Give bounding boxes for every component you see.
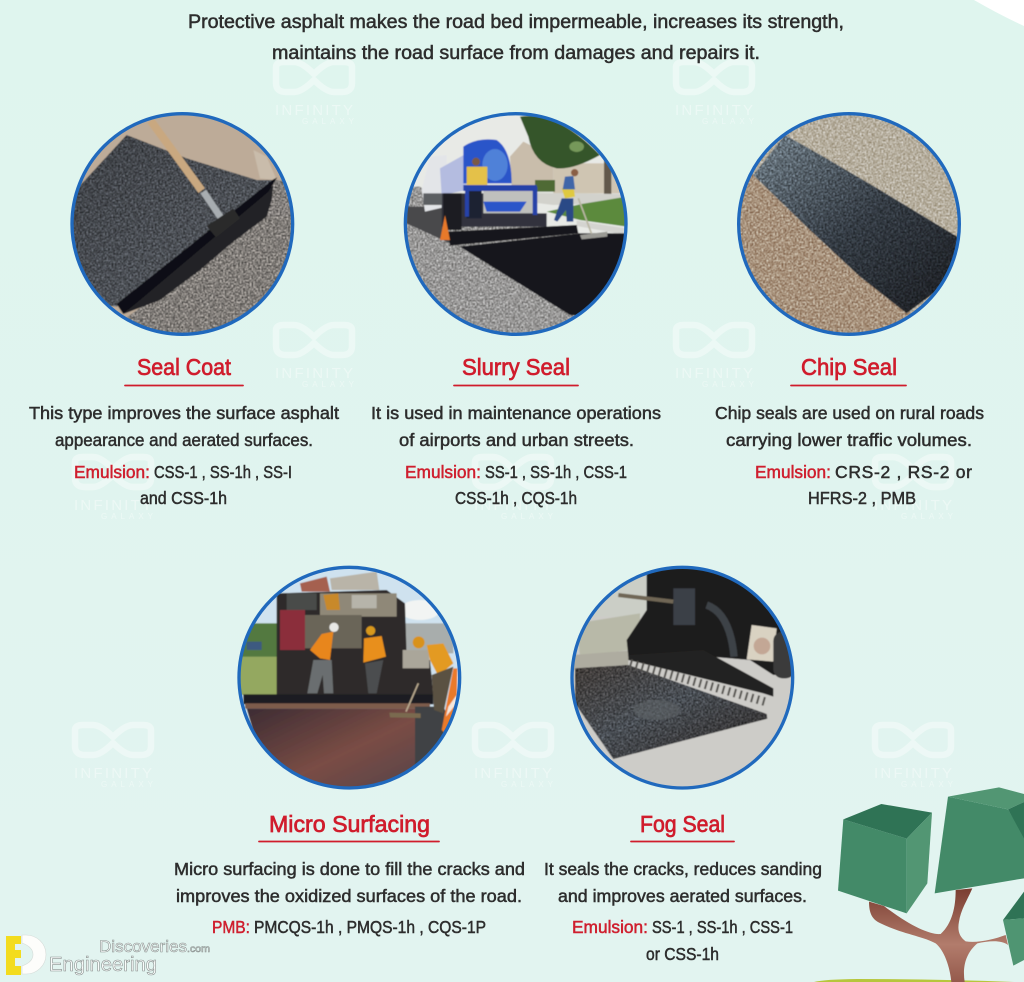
logo wordmark: .com: [187, 944, 210, 955]
photo: micro surfacing crew: [237, 566, 462, 790]
panel: slurry seal text: [371, 354, 661, 508]
description: carrying lower traffic volumes.: [726, 430, 972, 450]
workers: [310, 632, 333, 660]
description: [371, 403, 661, 450]
description: Chip seals are used on rural roads: [715, 403, 984, 423]
photo ring: [572, 567, 793, 788]
description: It is used in maintenance operations: [371, 403, 661, 423]
emulsion grades: Emulsion:: [755, 462, 831, 482]
photo ring: [72, 114, 293, 334]
panel: micro surfacing text: [174, 811, 525, 937]
emulsion grades: [755, 462, 972, 508]
description: Micro surfacing is done to fill the cracks and: [174, 859, 525, 879]
description: It seals the cracks, reduces sanding: [544, 859, 822, 879]
heading: seal coat: Seal Coat: [137, 354, 232, 380]
heading: chip seal: Chip Seal: [801, 354, 897, 380]
photo: chip seal surface: [737, 112, 961, 336]
description: [544, 859, 822, 906]
logo wordmark: [49, 937, 210, 976]
description: of airports and urban streets.: [399, 430, 634, 450]
heading underline: [454, 384, 578, 386]
binder grades: PMB:: [212, 917, 250, 937]
description: appearance and aerated surfaces.: [55, 430, 313, 450]
heading underline: [791, 384, 906, 386]
emulsion grades: [405, 462, 627, 508]
panel: fog seal text: [544, 811, 822, 964]
emulsion grades: HFRS-2 , PMB: [808, 488, 916, 508]
watermarks: [74, 62, 954, 789]
icon: low-poly tree: [814, 787, 1024, 982]
emulsion grades: SS-1 , SS-1h , CSS-1: [652, 917, 793, 937]
description: improves the oxidized surfaces of the road.: [176, 886, 522, 906]
heading: fog seal: Fog Seal: [640, 811, 725, 837]
photo ring: [239, 567, 460, 788]
emulsion grades: Emulsion:: [405, 462, 481, 482]
white corner shape: [974, 0, 1024, 26]
panel: chip seal text: [715, 354, 984, 508]
description: and improves aerated surfaces.: [558, 886, 807, 906]
emulsion grades: CSS-1 , SS-1h , SS-I: [154, 462, 292, 482]
photo: fog seal spray truck: [570, 566, 794, 790]
heading underline: [631, 840, 734, 842]
icon: ED mark: [6, 935, 46, 975]
logo wordmark: Discoveries: [99, 937, 187, 956]
description: [715, 403, 984, 450]
title: [188, 12, 844, 64]
photo ring: [739, 114, 959, 334]
emulsion grades: and CSS-1h: [140, 488, 227, 508]
photo: slurry seal machine: [404, 112, 628, 336]
logo: Engineering Discoveries: [6, 935, 210, 976]
emulsion grades: Emulsion:: [74, 462, 150, 482]
emulsion grades: or CSS-1h: [646, 944, 719, 964]
emulsion grades: SS-1 , SS-1h , CSS-1: [485, 462, 627, 482]
binder grades: PMCQS-1h , PMQS-1h , CQS-1P: [254, 917, 486, 937]
description: [174, 859, 525, 906]
heading underline: [259, 840, 439, 842]
emulsion grades: [74, 462, 292, 508]
logo wordmark: Engineering: [49, 954, 157, 976]
photo: seal coat squeegee: [70, 112, 294, 336]
emulsion grades: Emulsion:: [572, 917, 648, 937]
emulsion grades: [572, 917, 793, 964]
heading: slurry seal: Slurry Seal: [462, 354, 570, 380]
heading underline: [125, 384, 243, 386]
description: This type improves the surface asphalt: [29, 403, 339, 423]
heading: micro surfacing: Micro Surfacing: [269, 811, 430, 837]
photo ring: [405, 114, 626, 334]
description: [29, 403, 339, 450]
title: Protective asphalt makes the road bed impermeable, increases its strength,: [188, 12, 844, 33]
emulsion grades: CSS-1h , CQS-1h: [455, 488, 577, 508]
title: maintains the road surface from damages and repairs it.: [272, 43, 760, 64]
emulsion grades: CRS-2 , RS-2 or: [835, 462, 972, 482]
panel: seal coat text: [29, 354, 339, 508]
